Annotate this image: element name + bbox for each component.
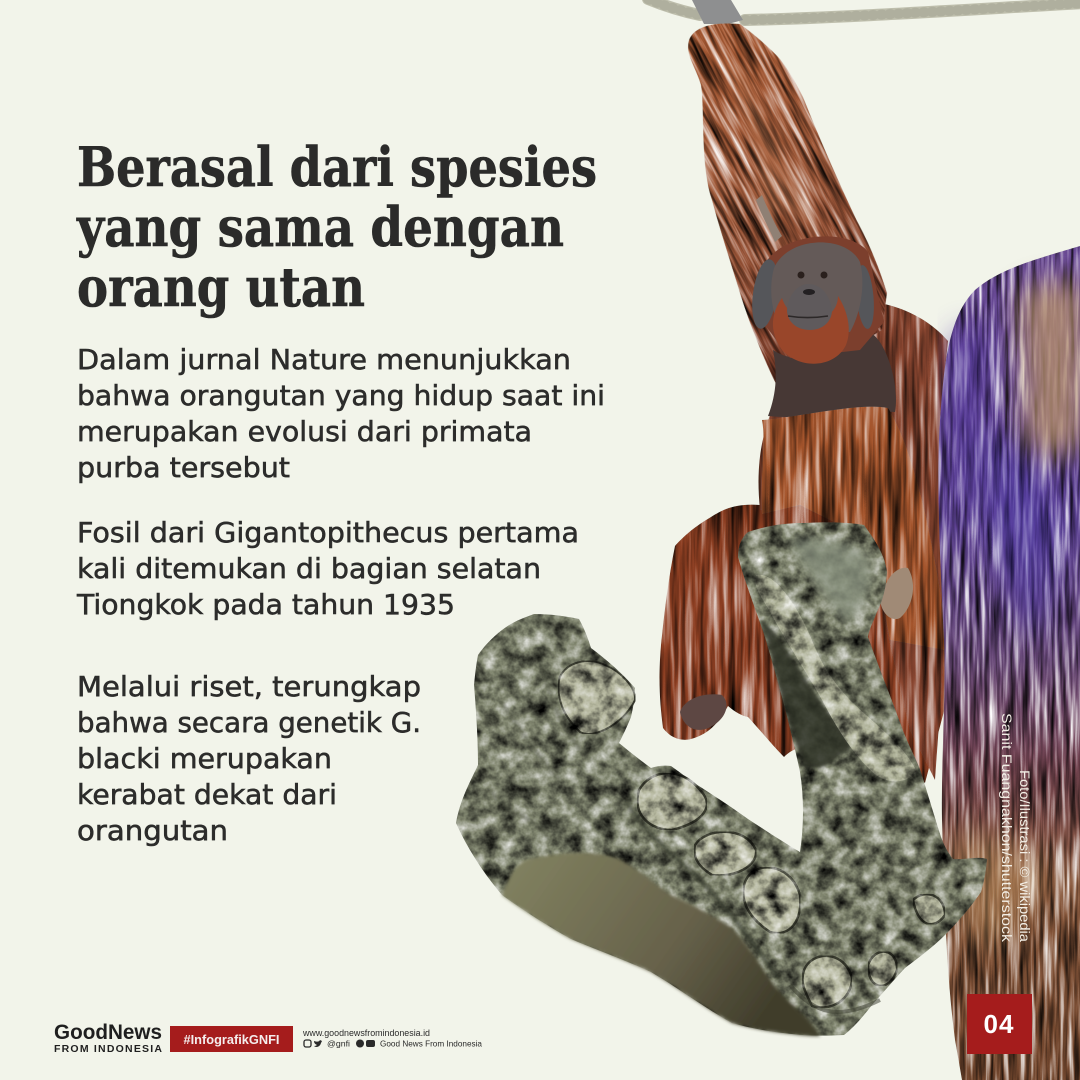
- text block: fosil Gigantopithecus: kali ditemukan di bagian selatan: [77, 552, 541, 585]
- social links: www.goodnewsfromindonesia.id: [302, 1028, 430, 1038]
- face skin: [771, 242, 862, 332]
- orangutan right hand: [880, 568, 913, 619]
- text block: fosil Gigantopithecus: Fosil dari Gigantopithecus pertama: [77, 516, 579, 549]
- text block: riset genetik: [77, 670, 421, 847]
- tan fur patch: [1019, 281, 1080, 458]
- text block: fosil Gigantopithecus: Tiongkok pada tahun 1935: [76, 588, 455, 621]
- photo credit: Sanit Fuangnakhon/shutterstock: [999, 713, 1014, 942]
- jaw cracks on left block: [490, 650, 590, 840]
- title: orang utan: [77, 255, 365, 319]
- nose: [803, 289, 815, 295]
- orangutan face: [748, 236, 884, 364]
- title: Berasal dari spesies: [77, 135, 597, 199]
- jaw crevice: [625, 800, 780, 980]
- orangutan lower hand: [680, 694, 727, 730]
- beard: [773, 296, 849, 364]
- dark channel along ramus: [760, 619, 852, 768]
- social links: @gnfi: [327, 1038, 350, 1048]
- eyes: [798, 272, 804, 278]
- social links: Good News From Indonesia: [380, 1038, 482, 1048]
- orangutan belly hair: [762, 407, 945, 650]
- icon: facebook: [356, 1040, 364, 1048]
- left cheek pad: [748, 258, 782, 330]
- orangutan inner arm: [756, 195, 782, 242]
- text block: riset genetik: bahwa secara genetik G.: [77, 706, 421, 739]
- large orangutan, purple-toned fur: [938, 246, 1080, 1080]
- icon: twitter: [314, 1040, 322, 1047]
- right eye: [820, 272, 828, 278]
- hashtag badge: #InfografikGNFI: [184, 1033, 280, 1047]
- molar 4: [802, 956, 852, 1008]
- text block: jurnal Nature: Dalam jurnal Nature menunjukkan: [77, 343, 571, 376]
- photo credit: [999, 713, 1032, 943]
- molar row: [637, 773, 945, 1008]
- text block: riset genetik: blacki merupakan: [77, 742, 332, 775]
- orangutan chest: [768, 330, 896, 417]
- text block: jurnal Nature: bahwa orangutan yang hidup saat ini: [77, 379, 605, 412]
- text block: riset genetik: orangutan: [77, 814, 228, 847]
- orangutan body hair: [758, 303, 948, 780]
- text block: riset genetik: kerabat dekat dari: [77, 778, 337, 811]
- hair ring around face: [755, 236, 884, 358]
- ramus molars: [755, 575, 917, 782]
- mouth: [788, 316, 828, 318]
- incisor tooth: [558, 661, 635, 734]
- page number: 04: [984, 1009, 1014, 1039]
- orangutan arm highlight: [720, 60, 825, 235]
- title: [76, 135, 597, 319]
- ramus top face: [790, 538, 871, 625]
- molar 5: [868, 952, 897, 986]
- orangutan hand gripping rope: [692, 0, 743, 24]
- logo: GoodNews From Indonesia: GoodNews: [54, 1021, 162, 1044]
- title: yang sama dengan: [76, 195, 564, 259]
- icon: instagram: [304, 1040, 311, 1047]
- photo credit: Foto/Ilustrasi : © wikipedia: [1017, 770, 1032, 943]
- text block: fosil Gigantopithecus: [76, 516, 579, 621]
- molar 3: [743, 867, 800, 933]
- icon: youtube: [366, 1040, 375, 1047]
- hashtag badge: [170, 1026, 293, 1052]
- rope: [648, 0, 1080, 20]
- page number: [967, 994, 1032, 1054]
- molar 1: [637, 773, 707, 830]
- logo: GoodNews From Indonesia: [54, 1021, 162, 1055]
- orangutan: hanging on rope: [538, 0, 1037, 783]
- molar 6: [913, 894, 945, 924]
- blue fur patch: [985, 430, 1056, 640]
- text block: riset genetik: Melalui riset, terungkap: [77, 670, 421, 703]
- left purple patch: [949, 327, 986, 520]
- text block: jurnal Nature: purba tersebut: [77, 451, 290, 484]
- orangutan lower arm and hair: [660, 480, 947, 783]
- text block: jurnal Nature: merupakan evolusi dari primata: [77, 415, 532, 448]
- social links: [302, 1028, 482, 1048]
- jaw inner shadow: [790, 985, 880, 1012]
- orangutan raised arm: [538, 0, 1037, 468]
- fossil jaw of Gigantopithecus: [456, 522, 987, 1036]
- jaw underside: [502, 853, 820, 1036]
- logo: GoodNews From Indonesia: FROM INDONESIA: [54, 1043, 162, 1055]
- lower golden fur: [954, 830, 1040, 950]
- text block: jurnal Nature: [77, 343, 605, 484]
- jaw main shape: [456, 522, 987, 1036]
- molar 2: [694, 832, 756, 875]
- right cheek pad: [854, 264, 876, 330]
- muzzle: [787, 284, 832, 330]
